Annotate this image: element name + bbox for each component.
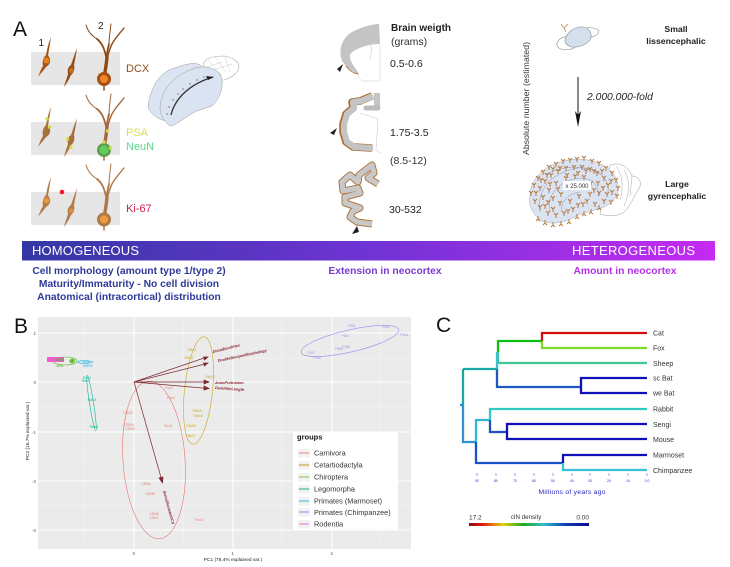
- density color legend: [469, 514, 589, 526]
- homogeneous criteria: Maturity/Immaturity - No cell division: [39, 279, 219, 290]
- row: Ki-67: Ki-67: [126, 203, 152, 215]
- carnivora point labels: CSN2: [123, 411, 133, 415]
- label: x 25.000: x 25.000: [565, 184, 589, 190]
- species labels: sc Bat: [653, 376, 673, 382]
- plot background: [38, 317, 411, 549]
- carnivora point labels: Fox2: [167, 396, 175, 400]
- text: large gyrencephalic: Large: [665, 179, 689, 189]
- panel letter C: C: [436, 314, 451, 337]
- text: fold change: 2.000.000-fold: [586, 92, 653, 103]
- icon: large gyrencephalic brain: [529, 156, 640, 227]
- homogeneous criteria: Cell morphology (amount type 1/type 2): [32, 266, 226, 277]
- text: small lissencephalic line 2: lissencephalic: [646, 36, 706, 46]
- carnivora point labels: Fox3: [164, 424, 172, 428]
- species labels: Chimpanzee: [653, 468, 692, 475]
- panel B: PCA biplot: [14, 315, 411, 563]
- axis tick labels: [32, 331, 333, 556]
- species labels: we Bat: [652, 390, 674, 398]
- panel letter B: B: [14, 315, 28, 338]
- species labels: Sengi: [653, 422, 671, 429]
- legend: Primates (Chimpanzee): [314, 508, 391, 517]
- loading labels: AxonProtrusion: [214, 381, 244, 385]
- lagomorph and marmoset labels: MSR2: [83, 364, 93, 368]
- chimpanzee point labels: PSi5: [342, 345, 350, 349]
- loading labels: [162, 343, 268, 525]
- lagomorph and marmoset labels: Rab4: [90, 425, 98, 429]
- species labels: Fox: [653, 346, 665, 352]
- neuron type label 2: 2: [98, 21, 104, 32]
- extension criterion: Extension in neocortex: [328, 266, 442, 277]
- axis tick labels: 1: [231, 551, 234, 556]
- gradient bar: homogeneous to heterogeneous: HETEROGENEOUS: [572, 243, 695, 258]
- legend: Chiroptera: [314, 472, 349, 482]
- text: small lissencephalic: Small: [664, 24, 688, 34]
- lagomorph and marmoset labels: MarSer: [82, 360, 95, 364]
- carnivora point labels: CSN5: [145, 492, 155, 496]
- species labels: Rabbit: [653, 406, 673, 414]
- carnivora point labels: CSN4: [124, 423, 134, 427]
- chimpanzee point labels: [307, 324, 408, 360]
- panel A right: absolute number comparison: [521, 24, 706, 227]
- time axis: 90: [475, 479, 479, 483]
- weight value small: 0.5-0.6: [390, 58, 423, 70]
- time axis: 70: [513, 479, 517, 483]
- time axis: 40: [570, 479, 574, 483]
- y axis title: PC2 (16.7% explained var.): [25, 401, 31, 460]
- panel C: phylogenetic tree: [436, 314, 692, 526]
- species labels: [652, 330, 692, 475]
- carnivora point labels: Fox4: [195, 518, 203, 522]
- chimpanzee point labels: PSi8: [313, 356, 321, 360]
- cetartiodactyla point labels: SNA3: [205, 375, 215, 379]
- density color legend: 0.00: [576, 514, 589, 522]
- species labels: Marmoset: [653, 452, 684, 460]
- chimpanzee point labels: PSi7: [307, 351, 315, 355]
- legend: Carnivora: [314, 448, 347, 458]
- axis tick labels: -1: [32, 430, 36, 435]
- loading labels: DistalDendrites: [212, 343, 240, 354]
- axis tick labels: 0: [33, 380, 36, 385]
- cetartiodactyla point labels: SNA6: [186, 424, 196, 428]
- panel letter A: A: [13, 18, 27, 41]
- chimpanzee point labels: PSi3: [341, 334, 349, 338]
- cetartiodactyla point labels: SNA2: [184, 356, 194, 360]
- panel A middle: coronal sections and brain weight: [330, 23, 451, 234]
- label: x 25.000: [563, 181, 591, 190]
- row: Ki-67: [31, 164, 152, 230]
- axis tick labels: 1: [33, 331, 36, 336]
- carnivora point labels: [123, 386, 203, 522]
- time axis: 60: [532, 479, 536, 483]
- loading arrows: [134, 357, 209, 483]
- weight value medium: 1.75-3.5: [390, 127, 429, 139]
- legend: [293, 432, 398, 530]
- homogeneous criteria: Anatomical (intracortical) distribution: [37, 292, 221, 303]
- section: gyrencephalic: [342, 165, 378, 234]
- axis title: Millions of years ago: [538, 489, 606, 496]
- cetartiodactyla point labels: SNA5: [193, 414, 203, 418]
- icon: rodent brain with migration arrow: [148, 56, 239, 126]
- panel A: neuron markers: [13, 18, 239, 230]
- time axis: 10: [626, 479, 630, 483]
- weight value medium parenthetical: (8.5-12): [390, 155, 427, 167]
- gradient bar: homogeneous to heterogeneous: [22, 241, 715, 260]
- carnivora point labels: CSN7: [149, 516, 159, 520]
- row: PSA NeuN: NeuN: [126, 141, 154, 153]
- time axis: 0.0: [645, 479, 649, 483]
- text: large gyrencephalic line 2: gyrencephalic: [648, 191, 706, 201]
- time axis: 20: [607, 479, 611, 483]
- axis tick labels: 0: [132, 551, 135, 556]
- legend: Primates (Marmoset): [314, 496, 382, 506]
- cetartiodactyla point labels: SNA1: [187, 348, 197, 352]
- chimpanzee point labels: PSi6: [335, 347, 343, 351]
- neuron type label 1: 1: [38, 38, 44, 49]
- section: lissencephalic: [337, 24, 380, 81]
- group ellipses: [53, 319, 401, 541]
- homogeneous criteria: [32, 266, 226, 303]
- row: DCX: [31, 24, 150, 90]
- axis tick labels: -3: [32, 528, 36, 533]
- carnivora point labels: CSN3: [125, 427, 135, 431]
- loading labels: SomaDiameterDCX: [162, 490, 175, 525]
- chimpanzee point labels: PSi1: [348, 324, 356, 328]
- row: PSA NeuN: [31, 94, 154, 160]
- time axis: 30: [588, 479, 592, 483]
- dendrogram: [460, 333, 647, 470]
- time axis: 80: [494, 479, 498, 483]
- lagomorph and marmoset labels: Rab3: [88, 398, 96, 402]
- lagomorph and marmoset labels: Rab1: [83, 376, 91, 380]
- chimpanzee point labels: PSi2: [382, 325, 390, 329]
- y axis label: Absolute number (estimated): [521, 42, 531, 155]
- weight value large: 30-532: [389, 204, 422, 216]
- density color legend: 17.2: [469, 514, 482, 522]
- species labels: Sheep: [653, 361, 673, 368]
- legend: Rodentia: [314, 520, 344, 528]
- axis tick labels: 2: [330, 551, 333, 556]
- x axis title: PC1 (78.4% explained var.): [204, 557, 263, 563]
- species labels: Mouse: [653, 437, 674, 444]
- arrow: fold increase: [575, 77, 581, 127]
- lagomorph and marmoset labels: Rab2: [82, 379, 90, 383]
- loading labels: DendriticLength: [215, 386, 245, 392]
- brain weight heading: Brain weigth: [391, 23, 451, 34]
- species labels: Cat: [653, 330, 664, 338]
- carnivora point labels: Fox1: [165, 386, 173, 390]
- carnivora point labels: CSN1: [141, 482, 151, 486]
- density color legend: cIN density: [511, 514, 542, 521]
- loading labels: DoubleBouquetMorphology: [217, 348, 268, 363]
- lagomorph and marmoset labels: wBt: [69, 359, 75, 363]
- grid: [38, 317, 411, 549]
- time axis: 50: [551, 479, 555, 483]
- legend: groups: [297, 432, 322, 442]
- amount criterion: Amount in neocortex: [574, 266, 677, 277]
- lagomorph and marmoset labels: sBt1: [56, 364, 64, 368]
- cetartiodactyla point labels: SNA7: [186, 434, 196, 438]
- row: DCX: DCX: [126, 63, 150, 75]
- axis tick labels: -2: [32, 479, 36, 484]
- icon: small lissencephalic brain: [557, 24, 599, 50]
- cetartiodactyla point labels: [184, 348, 215, 438]
- time axis: [475, 473, 649, 483]
- lagomorph and marmoset labels: [56, 359, 98, 429]
- carnivora point labels: CSN6: [149, 512, 159, 516]
- legend: Cetartiodactyla: [314, 460, 364, 470]
- cetartiodactyla point labels: SNA4: [192, 409, 202, 413]
- row: PSA NeuN: PSA: [126, 127, 149, 139]
- gradient bar: homogeneous to heterogeneous: HOMOGENEOUS: [32, 243, 139, 258]
- section: intermediate: [330, 93, 380, 153]
- legend: Legomorpha: [314, 484, 356, 494]
- rodentia cluster: [47, 357, 74, 364]
- brain weight units: (grams): [391, 36, 427, 48]
- chimpanzee point labels: PSi4: [400, 333, 408, 337]
